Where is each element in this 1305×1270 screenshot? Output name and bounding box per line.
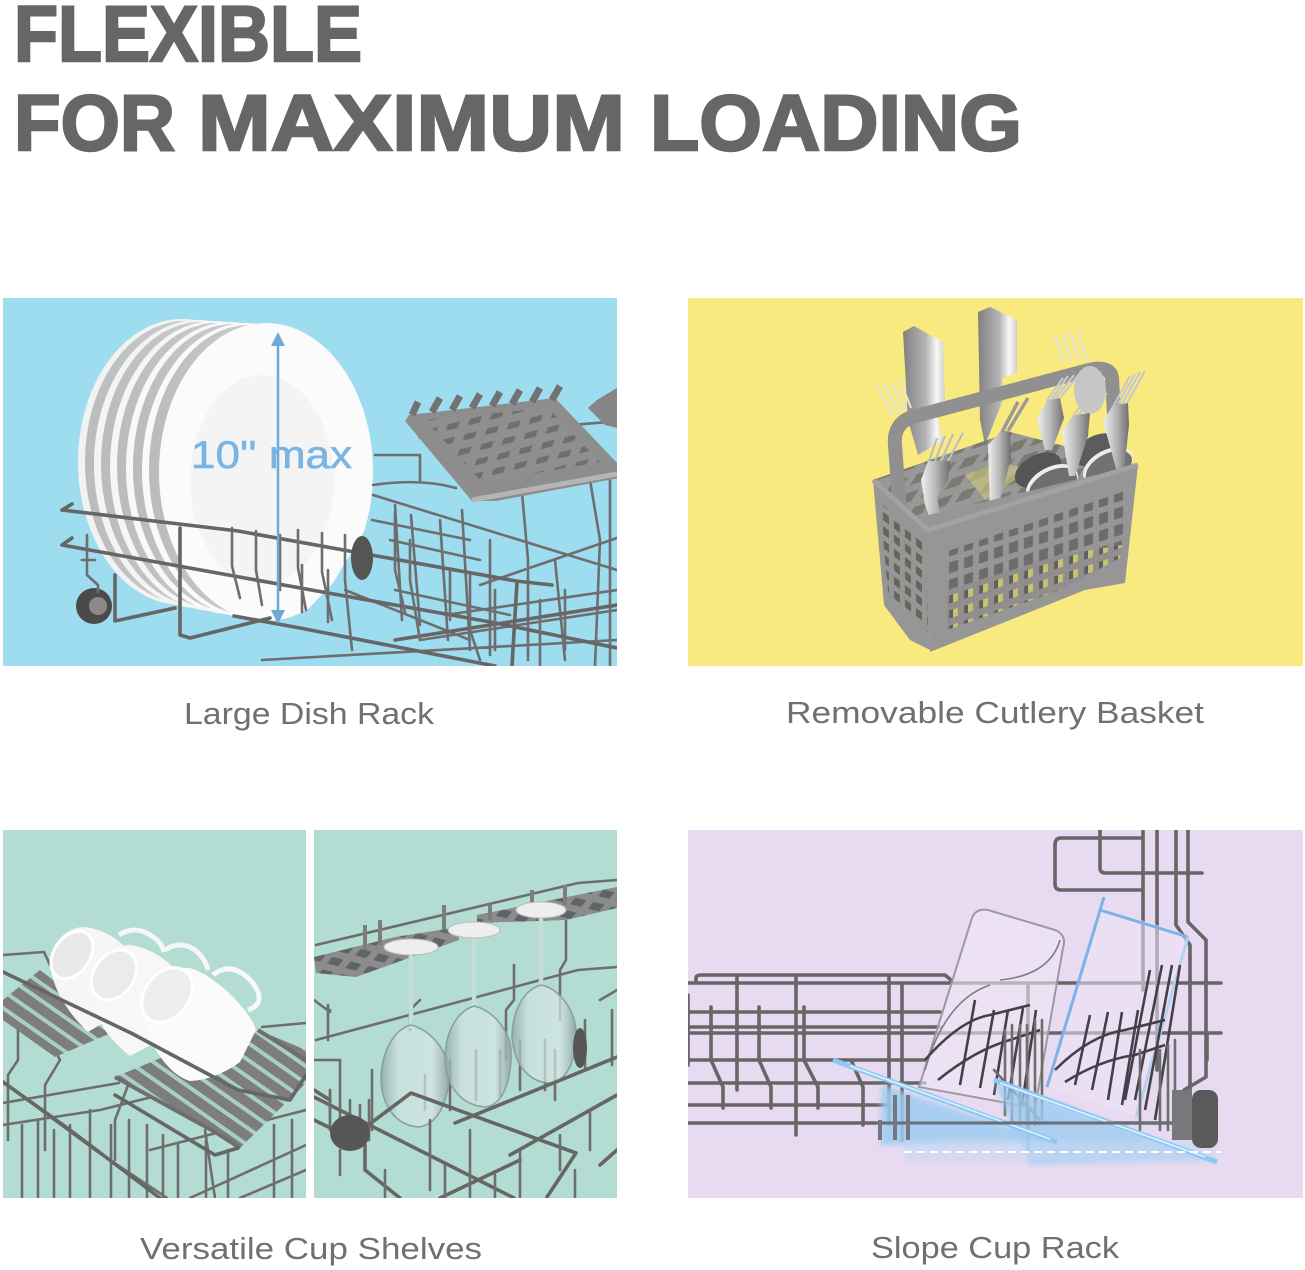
icon: basket interior xyxy=(876,432,1134,518)
icon: right glass xyxy=(1047,897,1188,1117)
title xyxy=(14,0,1022,167)
icon: dense wires right xyxy=(1140,1040,1175,1130)
icon: left bracket xyxy=(880,1095,908,1140)
icon: rack wheels xyxy=(330,1028,587,1151)
icon: upper shelves xyxy=(314,885,617,977)
caption: versatile cup shelves: Versatile Cup Shelves xyxy=(140,1231,482,1266)
caption: large dish rack: Large Dish Rack xyxy=(184,696,435,731)
rack: rear wires xyxy=(262,400,619,666)
rack: front wires and tines xyxy=(62,504,617,666)
icon: shelf discs xyxy=(384,902,566,955)
rack: wires seen through left glass xyxy=(925,1000,1040,1105)
icon: rack wheel xyxy=(76,535,112,624)
icon: wine glasses xyxy=(381,918,576,1127)
caption: slope cup rack: Slope Cup Rack xyxy=(871,1230,1120,1265)
rack: front rails xyxy=(314,1057,617,1198)
icon: fold-down shelf xyxy=(405,386,619,501)
icon: forks and spoons xyxy=(921,366,1146,515)
rack: back wires xyxy=(314,880,617,1140)
panel: cup shelf with cups xyxy=(3,830,306,1198)
rack: upright wires xyxy=(1055,830,1206,1105)
plate cutaway background xyxy=(309,530,364,608)
icon: rear forks xyxy=(877,331,1087,415)
caption: removable cutlery basket: Removable Cutlery Basket xyxy=(786,695,1204,730)
title: MAXIMUM xyxy=(198,78,625,167)
icon: knives xyxy=(903,307,1017,455)
title: FOR xyxy=(14,78,175,167)
icon: left glass xyxy=(919,910,1064,1108)
panel: removable cutlery basket xyxy=(688,298,1303,666)
icon: slatted shelf xyxy=(3,970,306,1148)
title: LOADING xyxy=(650,78,1022,167)
icon: dense wires left xyxy=(994,1020,1042,1125)
icon: white cups xyxy=(42,923,259,1081)
arrow: plate height xyxy=(271,332,285,624)
rack: main rail xyxy=(3,972,306,1198)
plate height label: 10'' max xyxy=(191,434,353,477)
icon: basket body xyxy=(873,465,1138,652)
rack: lower rail over highlight xyxy=(880,1122,1178,1124)
panel: cup shelf with wine glasses xyxy=(314,830,617,1198)
rack: lower wires xyxy=(3,952,306,1198)
rack: wires seen through right glass xyxy=(1055,965,1180,1120)
icon: small side wheel xyxy=(351,536,373,580)
rack: main frame xyxy=(688,975,1221,1150)
panel: slope cup rack xyxy=(688,830,1303,1198)
highlight: slope planes xyxy=(833,1060,1221,1165)
icon: basket handle xyxy=(895,369,1116,512)
icon: stack of plates xyxy=(78,319,373,621)
icon: rack wheel xyxy=(1172,1090,1218,1148)
panel: large dish rack xyxy=(3,298,619,666)
